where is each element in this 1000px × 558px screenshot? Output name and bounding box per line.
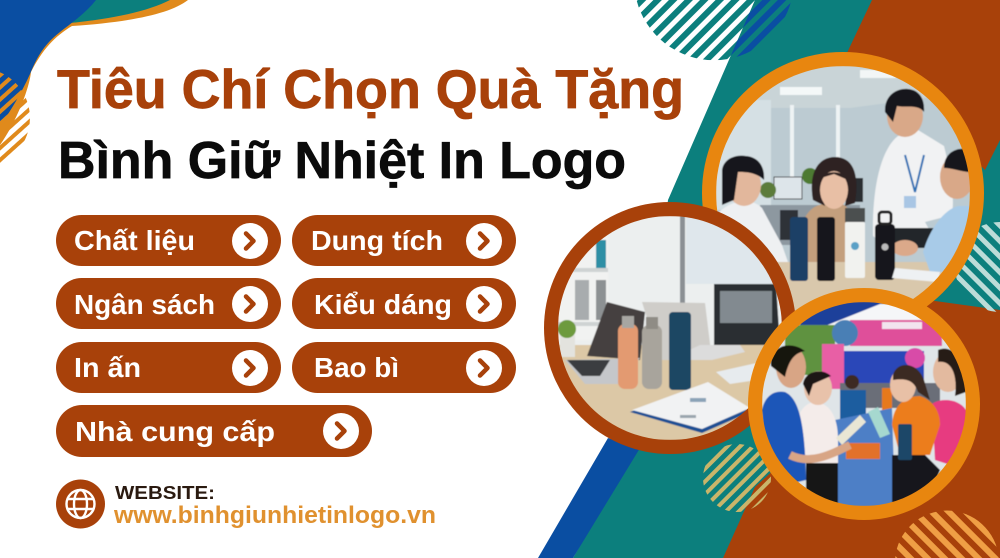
sub: laptop right xyxy=(642,302,745,360)
teal blob top left xyxy=(60,0,170,24)
pill: Bao bì: Bao bì xyxy=(314,352,399,383)
sub: trees xyxy=(785,325,835,375)
orange blob top left xyxy=(0,0,188,145)
sub: tent xyxy=(800,302,886,326)
title line 2: Bình Giữ Nhiệt In Logo xyxy=(58,132,626,190)
sub: table xyxy=(558,345,782,440)
stripes top right xyxy=(636,0,792,60)
sub: woman middle xyxy=(805,156,856,262)
brown upper right panel xyxy=(846,0,1000,170)
sub: gift bag xyxy=(846,443,880,459)
stripes right xyxy=(955,222,1000,312)
sub: pink banner xyxy=(850,320,942,346)
sub: black flask xyxy=(875,212,895,280)
sub: table xyxy=(778,262,942,310)
title line 1: Tiêu Chí Chọn Quà Tặng xyxy=(57,58,684,120)
sub: blue screen xyxy=(844,351,924,383)
sub: shelves xyxy=(558,240,608,326)
photo circle: desk with bottles xyxy=(544,202,796,454)
sub: plant xyxy=(558,320,576,357)
icon: globe xyxy=(56,480,105,528)
pill: In ấn xyxy=(56,342,281,393)
sub: woman left xyxy=(716,156,788,262)
sub: man standing xyxy=(873,89,953,248)
pill: Dung tích: Dung tích xyxy=(311,225,443,256)
sub: window xyxy=(686,218,772,284)
pill: Chất liệu xyxy=(56,215,281,266)
sub: navy bottle xyxy=(669,312,691,390)
sub: laptop left xyxy=(565,302,645,384)
sub: pink standee xyxy=(822,344,844,389)
sub: man right xyxy=(923,149,974,272)
sub: woman in pink xyxy=(932,349,966,470)
sub: documents xyxy=(630,382,750,433)
stripes top right on teal xyxy=(730,0,791,57)
sub: orange bottle xyxy=(618,316,638,389)
stripes bottom centre xyxy=(703,444,771,512)
pill: In ấn: In ấn xyxy=(74,352,141,383)
sub: black bottle xyxy=(817,217,835,281)
pill: Bao bì xyxy=(292,342,516,393)
sub: navy bottle xyxy=(790,217,808,281)
sub: man in blue xyxy=(762,345,806,484)
brown lower right panel xyxy=(723,300,1000,558)
pill: Dung tích xyxy=(292,215,516,266)
photo circle: office team with bottles xyxy=(702,52,984,334)
pill: Nhà cung cấp: Nhà cung cấp xyxy=(75,416,275,447)
pill: Kiểu dáng: Kiểu dáng xyxy=(314,289,452,320)
sub: arms xyxy=(790,445,850,459)
sub: woman in white xyxy=(798,371,838,506)
website label: WEBSITE: xyxy=(115,483,215,503)
sub: floor xyxy=(835,408,895,506)
sub: documents xyxy=(892,268,940,282)
sub: woman in orange xyxy=(890,365,940,505)
pill: Ngân sách: Ngân sách xyxy=(74,289,215,320)
teal diagonal panel xyxy=(573,0,1000,558)
sub: crowd xyxy=(840,374,940,420)
stripes left xyxy=(0,72,30,164)
sub: held bottles xyxy=(836,407,912,460)
sub: hands xyxy=(892,240,918,256)
photo circle: event booth xyxy=(748,288,980,520)
blue blob top left xyxy=(0,0,96,126)
pill: Chất liệu: Chất liệu xyxy=(74,225,195,256)
blue diagonal stripe xyxy=(538,438,640,558)
stripes bottom right xyxy=(895,511,999,558)
sub: silver bottle xyxy=(642,317,662,389)
website url: www.binhgiunhietinlogo.vn xyxy=(113,502,436,529)
pill: Ngân sách xyxy=(56,278,281,329)
sub: white bottle xyxy=(845,208,865,278)
pill: Kiểu dáng xyxy=(292,278,516,329)
sub: chair xyxy=(714,284,780,345)
pill: Nhà cung cấp xyxy=(56,405,372,457)
